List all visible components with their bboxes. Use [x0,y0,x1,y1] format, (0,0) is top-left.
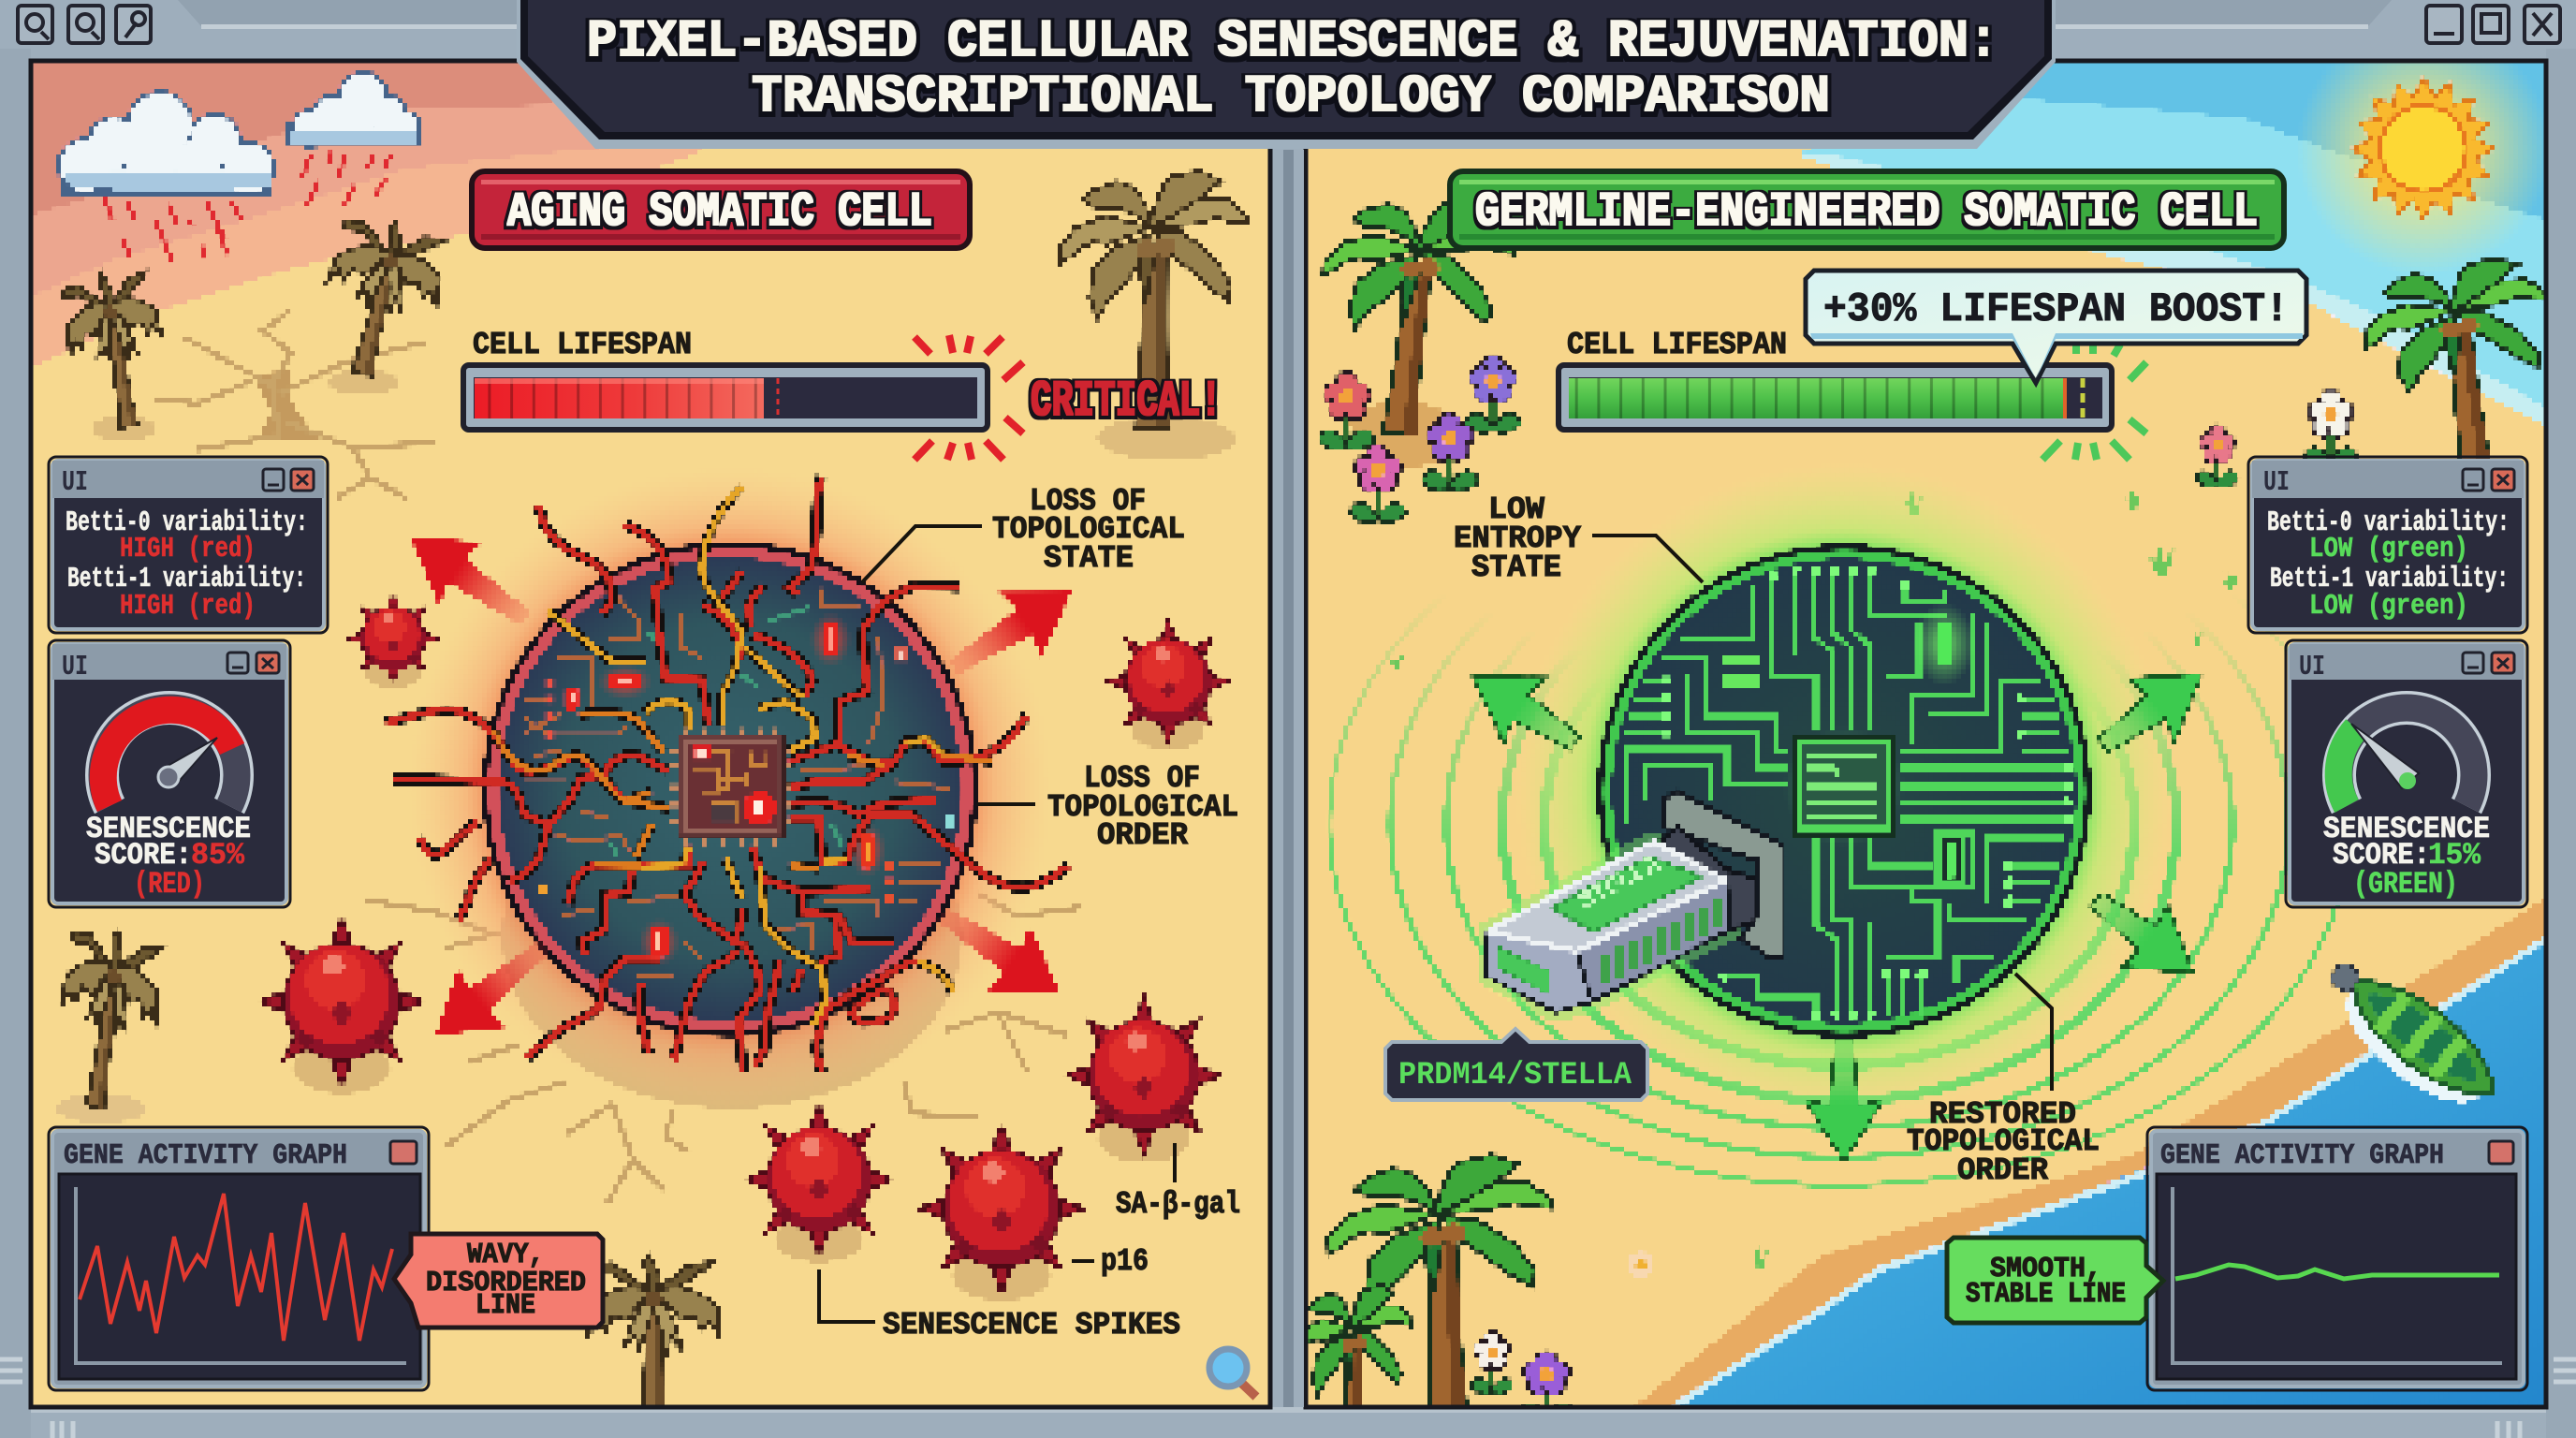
stella module [1487,791,1783,1012]
cell glow [1516,463,2172,1119]
peach sky band [34,148,702,365]
palm tree green lower large [1325,1153,1560,1422]
central chip [1784,726,1904,846]
leader and label: loss of topological order: LOSS OF [1084,761,1200,796]
arrow: down-right [2072,868,2217,1005]
critical label: CRITICAL! [1031,374,1222,431]
sky [1797,63,2546,426]
virus: SA-beta-gal spike [1066,996,1222,1163]
UI panel: betti variability [2248,457,2527,633]
gene activity graph: disordered [49,1127,429,1390]
virus: p16 spike [919,1124,1084,1301]
UI panel: senescence gauge 85%: (RED) [134,867,205,902]
beach sand [1306,63,2546,1407]
window control buttons [2426,6,2560,43]
UI panel: betti variability: HIGH (red) [120,590,256,623]
glowing red LEDs [537,613,953,965]
UI panel: betti variability: Betti-0 variability: [66,506,308,539]
label: SA-beta-gal: SA-β-gal [1116,1187,1240,1222]
callout: lifespan boost [1806,271,2306,383]
gene activity graph: disordered: GENE ACTIVITY GRAPH [64,1139,347,1172]
label: PRDM14/STELLA: PRDM14/STELLA [1398,1058,1632,1093]
label: p16: p16 [1101,1244,1149,1279]
arrow: up-right [932,559,1093,700]
sun [2297,22,2550,275]
panel: aging somatic cell [31,63,1270,1427]
leader and label: restored topological order: ORDER [1957,1153,2048,1188]
energy rings [1329,462,2349,1185]
callout: smooth stable line [1947,1238,2163,1323]
palm tree dry 3 [1060,170,1247,461]
callout: smooth stable line: STABLE LINE [1966,1278,2126,1311]
UI panel: betti variability: UI [62,466,88,499]
red rain [103,152,392,264]
UI panel: senescence gauge 15% [2286,640,2527,907]
tangled wires [386,477,1068,1072]
title text [587,11,1998,126]
callout: wavy disordered line [394,1234,603,1328]
palm tree dry 2 [323,220,449,393]
label: SA-beta-gal [1116,1143,1240,1222]
leader and label: low entropy state [1454,492,1703,585]
circuit nodes [1661,565,2072,1020]
wet sand [1633,898,2546,1407]
cell shadow on ground [501,899,964,1109]
icon: magnifier [1209,1349,1256,1397]
leader and label: low entropy state: LOW [1488,492,1544,527]
ocean [1674,939,2546,1407]
UI panel: betti variability [49,457,328,633]
leader and label: low entropy state: STATE [1471,550,1561,585]
flowers [1319,355,2357,1421]
leader and label: restored topological order: TOPOLOGICAL [1907,1124,2100,1159]
label: PRDM14/STELLA [1385,1029,1647,1100]
leader and label: loss of topological state: TOPOLOGICAL [992,512,1185,547]
central chip [670,728,792,845]
arrow: down [1805,1040,1883,1162]
cell body [1603,550,2086,1033]
cell body [489,548,972,1031]
label: senescence spikes: SENESCENCE SPIKES [883,1308,1180,1343]
grass tufts [1389,486,2239,1269]
sand background [31,63,1270,1407]
arrow: down-left [411,917,569,1066]
cell glow [431,491,1030,1077]
dark pink sky [31,63,580,215]
arrow: down-right [921,882,1081,1024]
green LEDs [1724,603,1974,884]
alert rays [915,335,1023,460]
lifespan bar: boosted [1559,365,2112,430]
panel: germline-engineered somatic cell [1295,22,2570,1438]
virus: senescence spike small [348,593,438,689]
UI panel: senescence gauge 15%: SENESCENCE [2323,812,2490,846]
leader and label: loss of topological order: ORDER [1097,818,1188,853]
UI panel: betti variability: UI [2263,466,2290,499]
leader and label: low entropy state: ENTROPY [1454,521,1581,556]
arrow: up-right [2080,642,2225,777]
leader and label: loss of topological state [862,484,1185,582]
UI panel: senescence gauge 85%: UI [62,651,88,683]
virus: senescence spike left [259,917,424,1094]
callout: wavy disordered line: WAVY, [467,1239,544,1271]
leader and label: restored topological order: RESTORED [1929,1097,2076,1132]
title text: TRANSCRIPTIONAL TOPOLOGY COMPARISON [752,66,1830,126]
arrow: up-left [1452,644,1597,776]
callout: smooth stable line: SMOOTH, [1990,1253,2101,1285]
cloud small [289,74,418,145]
callout: lifespan boost: +30% LIFESPAN BOOST! [1823,286,2289,333]
label: senescence spikes [819,1269,1180,1343]
title text: PIXEL-BASED CELLULAR SENESCENCE & REJUVENATION: [587,11,1998,71]
gene activity graph: stable [2147,1127,2527,1390]
leader and label: loss of topological state: LOSS OF [1030,484,1146,519]
lifespan bar: critical [463,365,988,430]
palm tree dry 4 [56,927,168,1123]
circuit traces [1623,570,2068,1015]
cell lifespan label: CELL LIFESPAN [473,328,692,362]
pixel artwork: aging scene [31,63,1270,1427]
UI panel: senescence gauge 85%: SENESCENCE [86,812,251,846]
UI panel: betti variability: LOW (green) [2309,533,2468,565]
callout: wavy disordered line: DISORDERED [426,1267,586,1299]
heading: aging somatic cell: AGING SOMATIC CELL [507,186,932,240]
leader and label: loss of topological order: TOPOLOGICAL [1047,790,1238,825]
ground cracks [156,310,1080,1203]
cell lifespan label: CELL LIFESPAN [1567,328,1787,362]
leader and label: loss of topological order [977,761,1238,853]
aging cell with tangled wiring [386,466,1068,1112]
UI panel: betti variability: HIGH (red) [120,533,256,565]
cloud large [60,94,272,193]
rays around bar [2042,345,2146,460]
UI panel: betti variability: LOW (green) [2309,590,2468,623]
virus: senescence spike bottom [745,1104,893,1262]
germline cell with restored circuit [1487,463,2172,1119]
boat [2308,946,2510,1127]
UI panel: senescence gauge 85%: SCORE: [95,838,192,873]
palm tree green upper right [2355,254,2570,490]
upper sky [1928,63,2546,220]
title plate [517,0,2056,149]
UI panel: senescence gauge 85%: 85% [191,838,245,873]
leader and label: loss of topological state: STATE [1044,541,1134,576]
virus: senescence spike upper right [1107,620,1229,750]
heading: aging somatic cell [472,171,970,248]
foam [1674,939,2546,1407]
gene activity graph: stable: GENE ACTIVITY GRAPH [2160,1139,2444,1172]
leader and label: restored topological order [1907,974,2100,1188]
heading: germline-engineered somatic cell: GERMLINE-ENGINEERED SOMATIC CELL [1475,186,2258,240]
label: p16 [1072,1244,1149,1279]
UI panel: senescence gauge 15%: 15% [2428,838,2481,873]
heading: germline-engineered somatic cell [1450,171,2284,248]
surf haze [1797,155,2546,426]
UI panel: senescence gauge 15%: SCORE: [2333,838,2430,873]
palm tree green lower small [1295,1285,1411,1438]
palm tree dry 5 [586,1254,721,1427]
arrow: up-left [388,506,549,651]
UI panel: senescence gauge 15%: UI [2299,651,2325,683]
palm tree green upper left [1306,189,1519,473]
UI panel: betti variability: Betti-1 variability: [67,563,306,595]
light pink sky [34,101,599,295]
stella module: STELLA [1574,850,1664,915]
toolbar icons: magnifier buttons [18,6,151,43]
UI panel: senescence gauge 15%: (GREEN) [2353,867,2458,902]
UI panel: senescence gauge 85% [49,640,290,907]
callout: wavy disordered line: LINE [476,1289,535,1322]
pixel artwork: rejuvenated scene [1295,22,2570,1438]
palm tree dry 1 [61,267,164,440]
